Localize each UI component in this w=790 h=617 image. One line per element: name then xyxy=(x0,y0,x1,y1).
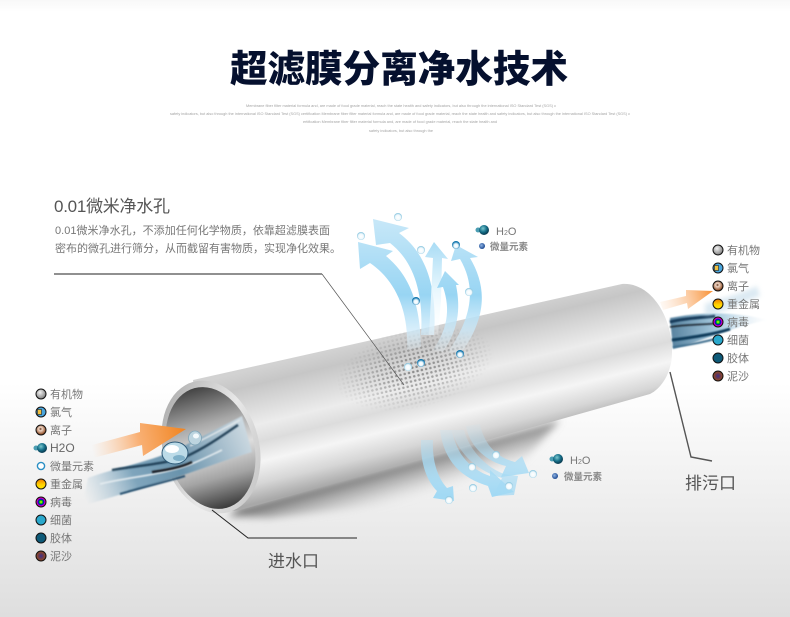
legend: inlet contaminants: 重金属 xyxy=(50,477,83,491)
pipe xyxy=(147,284,672,525)
label: trace elements: 微量元素 xyxy=(564,471,603,483)
callout description: 密布的微孔进行筛分，从而截留有害物质，实现净化效果。 xyxy=(55,241,341,255)
label: H2O: H2O xyxy=(570,455,591,467)
legend: inlet contaminants: 氯气 xyxy=(50,405,72,419)
legend: outlet contaminants: 离子 xyxy=(727,279,749,293)
legend: inlet contaminants xyxy=(34,387,94,563)
subtitle: fine print: Membrane fiber filter material formula and, are made of food grade material, reach the state health and safety indicators, but also through the international ISO Standard Test (SGS) c xyxy=(246,103,556,108)
callout heading: 0.01微米净水孔 xyxy=(54,197,170,216)
label: water inlet: 进水口 xyxy=(268,552,319,571)
icon: trace element xyxy=(479,243,485,249)
legend: filtered water upper xyxy=(476,225,529,253)
label: drain outlet: 排污口 xyxy=(685,474,736,493)
water bubbles xyxy=(357,213,537,504)
legend: outlet contaminants: 病毒 xyxy=(727,315,749,329)
arrows: downward water flow xyxy=(421,424,529,501)
label: trace elements: 微量元素 xyxy=(490,241,529,253)
legend: outlet contaminants: 细菌 xyxy=(727,334,749,347)
subtitle: fine print: safety indicators, but also through the international ISO Standard Test (SGS) certification Membrane fiber filter material formula and, are made of food grade material, reach the state health and safety indicators, but also through the international ISO Standard Test (SGS) c xyxy=(170,111,630,116)
arrow: water entering xyxy=(92,423,186,458)
callout description xyxy=(55,223,341,255)
callout description: 0.01微米净水孔，不添加任何化学物质，依靠超滤膜表面 xyxy=(55,223,330,237)
legend: outlet contaminants: 氯气 xyxy=(727,261,749,275)
micro-pore dot pattern xyxy=(344,329,486,408)
legend: inlet contaminants: 离子 xyxy=(50,423,72,437)
legend: inlet contaminants: 病毒 xyxy=(50,495,72,509)
water droplets at inlet xyxy=(162,431,202,464)
legend: inlet contaminants: 细菌 xyxy=(50,514,72,527)
legend: inlet contaminants: H2O xyxy=(50,441,75,455)
icon: H2O molecule xyxy=(476,225,489,235)
legend: outlet contaminants: 重金属 xyxy=(727,297,760,311)
callout: 0.01 micron pores xyxy=(54,197,341,255)
pipe shadow xyxy=(228,420,560,518)
water ribbon: outlet xyxy=(670,286,768,349)
label: H2O: H2O xyxy=(496,226,517,238)
legend: outlet contaminants: 有机物 xyxy=(727,243,760,257)
title: 超滤膜分离净水技术 xyxy=(230,48,568,90)
subtitle: fine print: ertification Membrane fiber filter material formula and, are made of food grade material, reach the state health and xyxy=(303,119,497,124)
legend: outlet contaminants: 泥沙 xyxy=(727,370,749,383)
legend: filtered water lower xyxy=(550,454,603,483)
pipe opening interior xyxy=(152,377,269,519)
pipe opening rim xyxy=(147,369,275,525)
icon: H2O molecule xyxy=(550,454,563,464)
icon: trace element xyxy=(552,473,558,479)
legend: inlet contaminants: 有机物 xyxy=(50,387,83,401)
water ribbon: inlet xyxy=(82,416,252,506)
legend: outlet contaminants xyxy=(713,243,760,383)
legend: outlet contaminants: 胶体 xyxy=(727,351,749,365)
legend: inlet contaminants: 泥沙 xyxy=(50,550,72,563)
legend: inlet contaminants: 胶体 xyxy=(50,531,72,545)
leader line: drain outlet xyxy=(670,372,712,461)
arrow: water exiting xyxy=(660,290,713,310)
leader line: pores xyxy=(54,274,404,385)
arrows: upward water flow xyxy=(358,219,482,352)
legend: inlet contaminants: 微量元素 xyxy=(50,459,94,473)
subtitle: fine print xyxy=(170,103,630,133)
pipe body xyxy=(193,284,672,513)
leader line: water inlet xyxy=(212,510,357,538)
subtitle: fine print: safety indicators, but also through the xyxy=(369,128,434,133)
